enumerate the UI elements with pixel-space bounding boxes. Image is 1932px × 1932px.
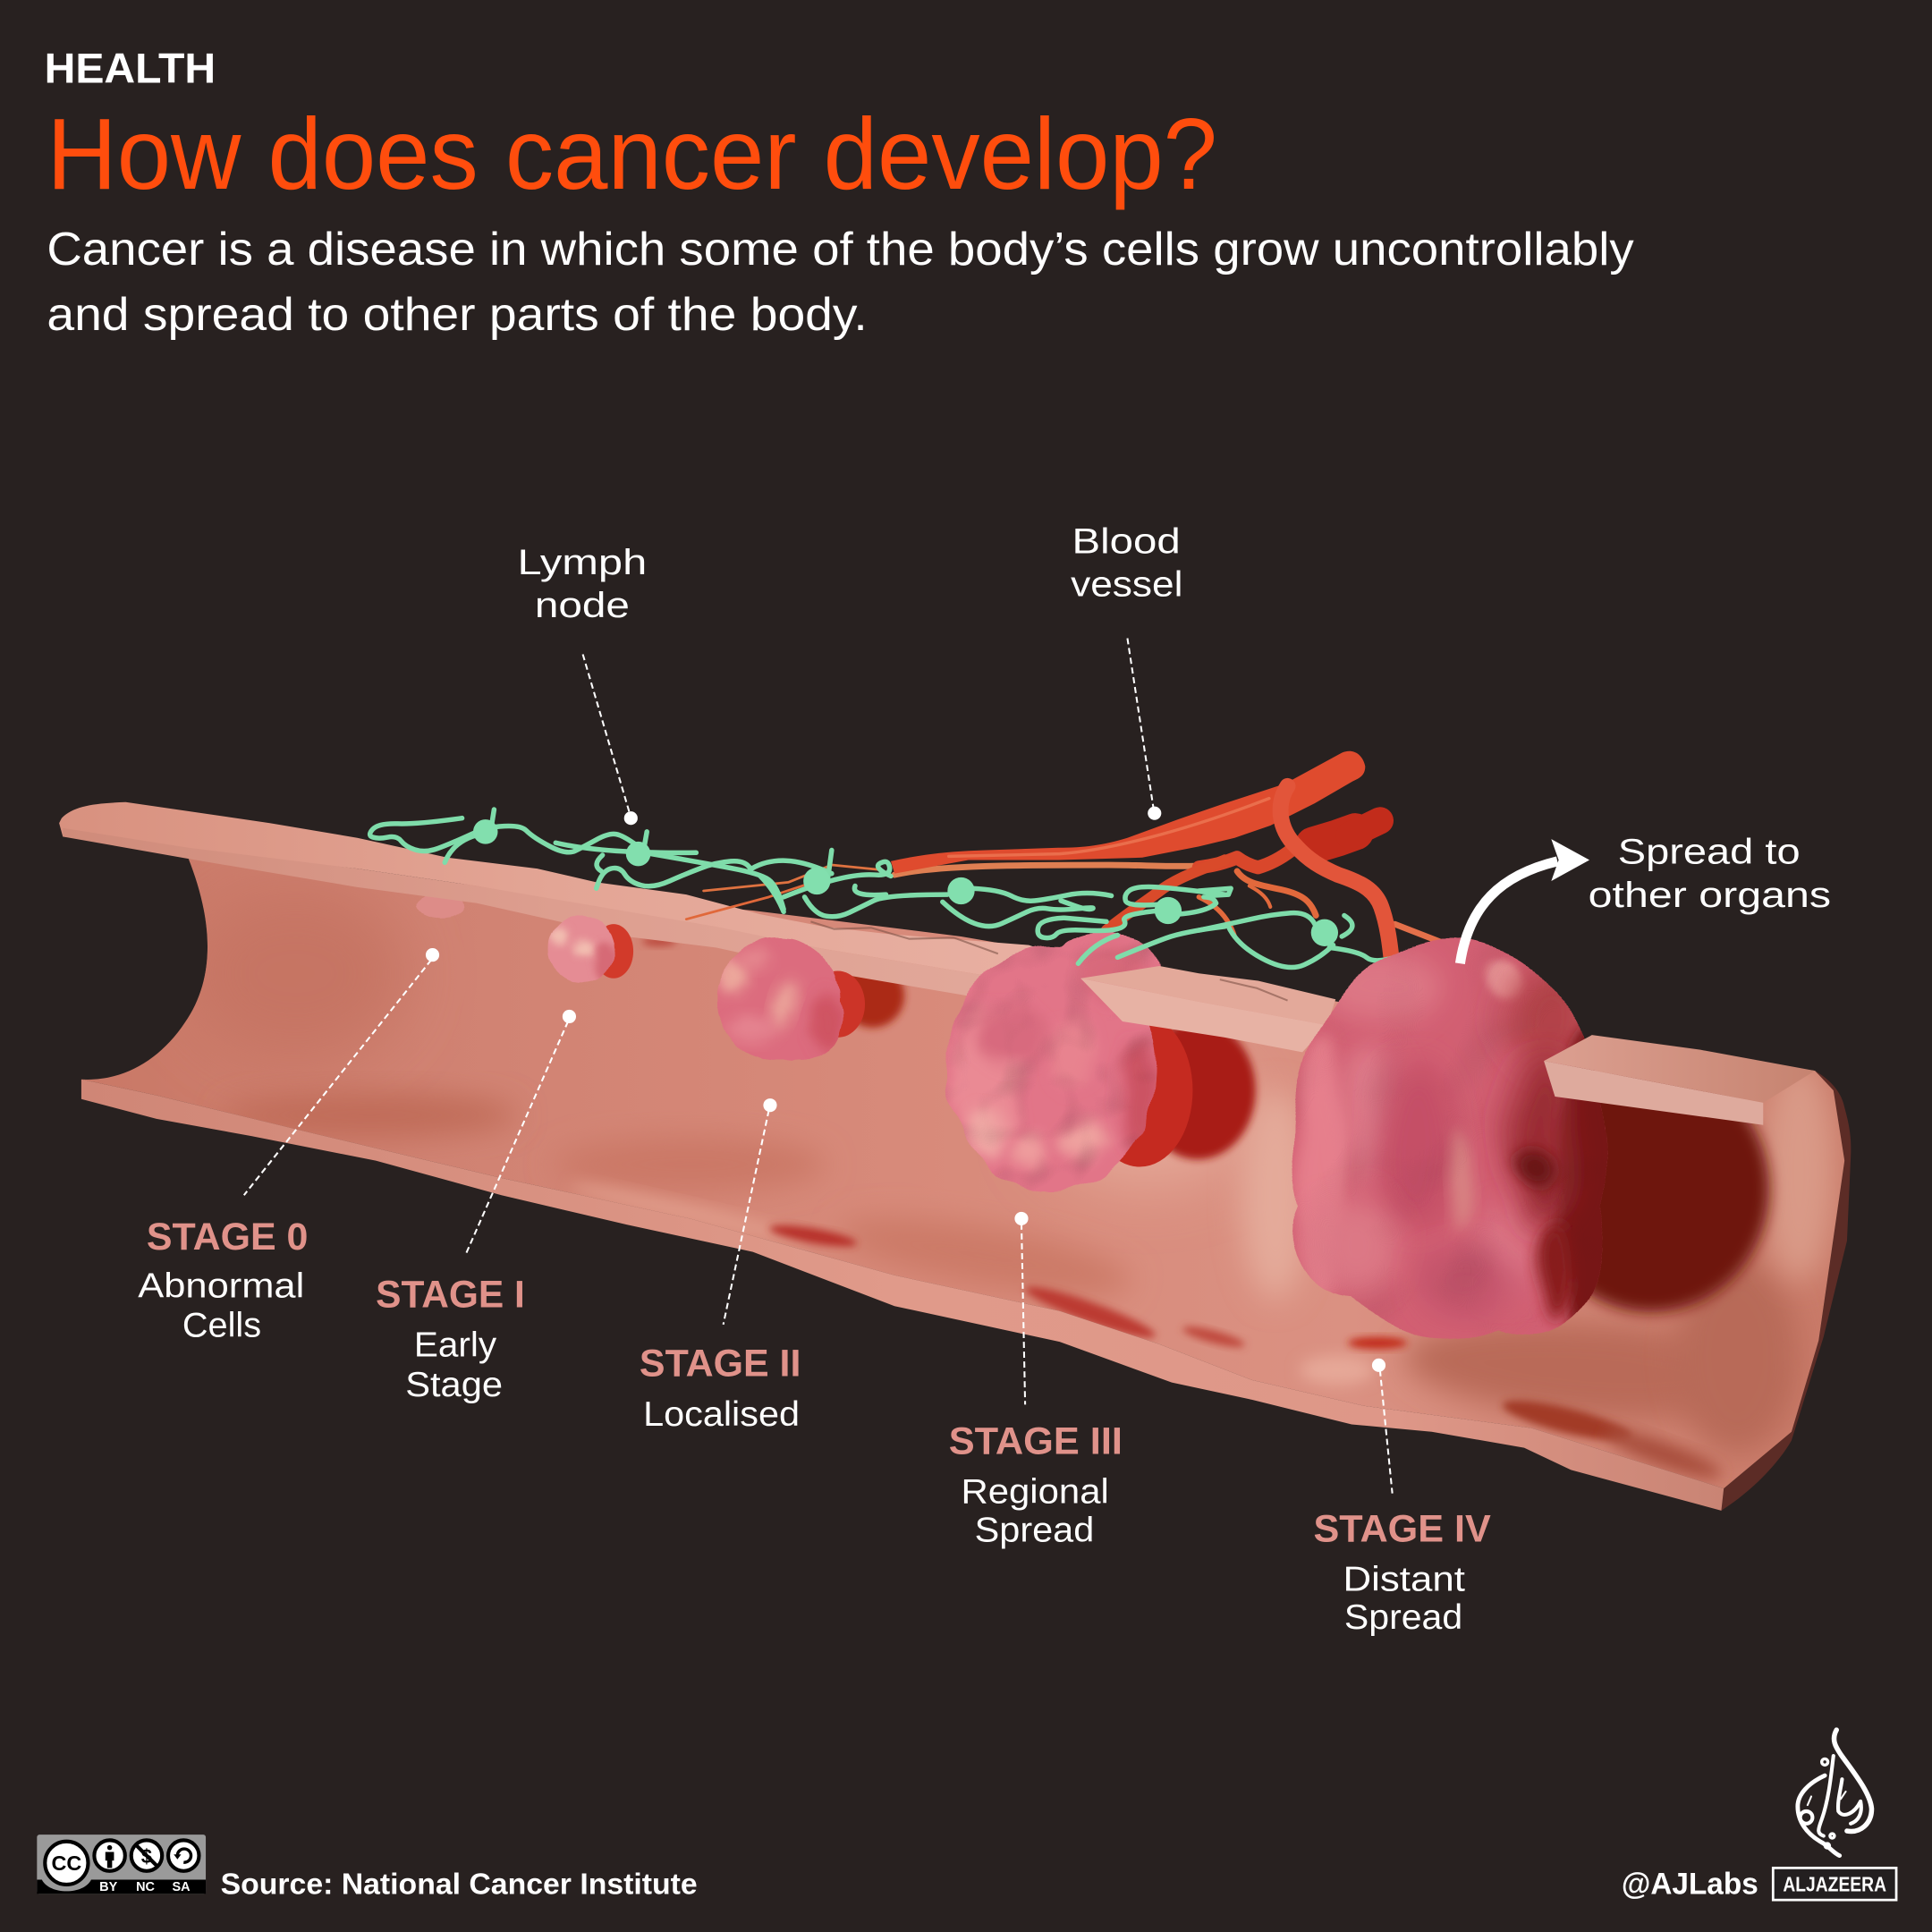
stage I tumour bbox=[547, 916, 633, 983]
main artery bbox=[891, 751, 1365, 874]
callout: stage 0: Cells bbox=[182, 1307, 261, 1345]
logo emblem: Al Jazeera calligraphic drop bbox=[1798, 1730, 1871, 1856]
stage III tumour bbox=[936, 924, 1192, 1201]
source line: Source: National Cancer Institute bbox=[221, 1868, 698, 1901]
creative commons badge: NC bbox=[136, 1880, 156, 1894]
stage IV tumour bbox=[1292, 937, 1608, 1339]
bottom lip of tube bbox=[81, 1080, 1724, 1511]
callout: stage I: STAGE I bbox=[376, 1274, 525, 1317]
right lip front face bbox=[1544, 1061, 1763, 1125]
callout: blood vessel bbox=[1071, 522, 1182, 820]
interior shading and tumour shadows bbox=[185, 887, 1836, 1487]
tube illustration bbox=[59, 751, 1851, 1511]
top lip: upper face bbox=[59, 802, 1047, 986]
artery end dark branch bbox=[1313, 820, 1380, 845]
callout: stage IV: Distant bbox=[1343, 1560, 1465, 1598]
callout: stage 0: STAGE 0 bbox=[147, 1216, 308, 1258]
lymphatic vessels bbox=[370, 809, 1394, 1001]
callout: blood vessel: Blood bbox=[1072, 522, 1181, 562]
logo wordmark: ALJAZEERA: ALJAZEERA bbox=[1783, 1873, 1886, 1896]
callout: stage II: Localised bbox=[643, 1395, 800, 1434]
label: spread to other organs: other organs bbox=[1589, 876, 1831, 915]
title: How does cancer develop? bbox=[47, 97, 1217, 210]
top lip: front face bbox=[63, 828, 1047, 1001]
callout: stage I bbox=[376, 1010, 576, 1404]
top lip right section bbox=[1544, 1035, 1815, 1125]
creative commons badge bbox=[37, 1835, 206, 1894]
callout: stage 0: Abnormal bbox=[138, 1267, 304, 1306]
callout: stage II bbox=[640, 1098, 801, 1434]
callout: stage IV: STAGE IV bbox=[1313, 1507, 1491, 1550]
callout: stage III: Regional bbox=[961, 1473, 1109, 1512]
middle lip upper face bbox=[1080, 966, 1335, 1025]
stage 0 abnormal cells bbox=[418, 894, 464, 918]
lymph nodes bbox=[473, 819, 1338, 946]
creative commons badge: CC bbox=[51, 1852, 81, 1875]
section tag: HEALTH: HEALTH bbox=[45, 45, 216, 91]
stage II tumour bbox=[717, 937, 865, 1061]
callout: lymph node: Lymph bbox=[518, 543, 647, 582]
creative commons badge: $ bbox=[141, 1845, 152, 1868]
top lip middle section bbox=[810, 921, 1335, 1052]
thin artery branches bbox=[686, 851, 1445, 944]
creative commons badge: SA bbox=[172, 1880, 191, 1894]
arrow: spread to other organs bbox=[1460, 839, 1589, 963]
right dark end rim bbox=[1721, 1071, 1851, 1511]
callout: stage IV: Spread bbox=[1344, 1598, 1462, 1637]
callout: stage 0 bbox=[138, 948, 439, 1345]
callout: stage III bbox=[949, 1212, 1123, 1549]
callout: blood vessel: vessel bbox=[1071, 565, 1182, 605]
subtitle: Cancer is a disease in which some of the body’s cells grow uncontrollably bbox=[47, 224, 1635, 275]
crossing vessel bbox=[1281, 786, 1393, 967]
callout: stage II: STAGE II bbox=[640, 1343, 801, 1385]
artery highlight bbox=[949, 799, 1269, 856]
lip cracks bbox=[810, 921, 1288, 1001]
social handle: @AJLabs bbox=[1622, 1867, 1758, 1901]
middle lip front face bbox=[1080, 979, 1327, 1052]
callout: stage III: Spread bbox=[975, 1511, 1094, 1549]
label: spread to other organs: Spread to bbox=[1618, 833, 1801, 872]
blood vessels bbox=[686, 751, 1445, 967]
subtitle bbox=[47, 224, 1635, 341]
creative commons badge: BY bbox=[99, 1880, 118, 1894]
callout: lymph node bbox=[518, 543, 647, 825]
callout: stage IV bbox=[1313, 1359, 1491, 1637]
tube interior wall bbox=[81, 859, 1844, 1488]
label: spread to other organs bbox=[1589, 833, 1831, 915]
callout: lymph node: node bbox=[535, 586, 630, 625]
right lip upper face bbox=[1544, 1035, 1815, 1103]
callout: stage I: Early bbox=[414, 1326, 497, 1365]
callout: stage I: Stage bbox=[405, 1366, 503, 1404]
subtitle: and spread to other parts of the body. bbox=[47, 289, 868, 341]
callout: stage III: STAGE III bbox=[949, 1420, 1123, 1463]
logo wordmark: ALJAZEERA bbox=[1773, 1868, 1896, 1900]
